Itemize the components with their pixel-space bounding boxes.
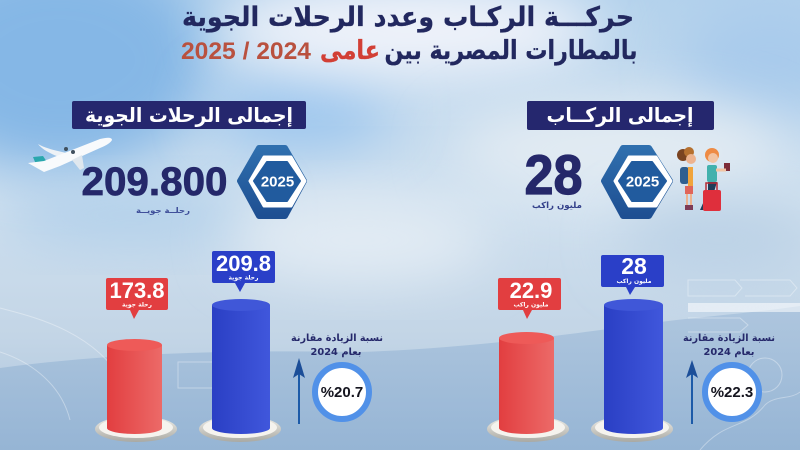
bar: passengers 2025: [591, 299, 673, 442]
bar: passengers 2024: [487, 332, 569, 442]
callout: 173.8: 173.8: [109, 278, 165, 303]
panel: passengers header: إجمالى الركــاب: [546, 103, 694, 127]
title: [181, 2, 638, 66]
bar: flights 2024: [95, 339, 177, 442]
callout: 22.9: 22.9: [510, 278, 552, 303]
callout: 28: مليون راكب: [617, 278, 652, 285]
flights comparison label: نسبة الزيادة مقارنة: [291, 333, 383, 344]
title line 1: حركـــة الركـاب وعدد الرحلات الجوية: [182, 2, 634, 33]
bar: flights 2025: [199, 299, 281, 442]
chart: flights: [95, 251, 383, 442]
flights comparison label: بعام 2024: [310, 347, 362, 358]
title line 2: airports: بالمطارات المصرية بين: [384, 36, 638, 66]
passengers percentage: %22.3: [711, 384, 753, 401]
icon: 2025 hexagon flights: 2025: [261, 174, 294, 190]
panel: flights header: إجمالى الرحلات الجوية: [85, 103, 293, 127]
stat: flights total: 209.800: [82, 160, 228, 204]
icon: travellers: [677, 147, 730, 211]
icon: 2025 hexagon passengers: [604, 148, 671, 216]
stat: passengers total: 28: [524, 143, 582, 206]
callout: 209.8: [212, 251, 275, 292]
title line 2: years: 2025 / 2024: [181, 38, 312, 65]
passengers percentage: [705, 365, 759, 419]
flights unit: رحلــة جويــة: [136, 206, 190, 215]
arrow: passengers increase: [686, 360, 698, 424]
flights percentage: [315, 365, 369, 419]
arrow: flights increase: [293, 358, 305, 424]
callout: 22.9: مليون راكب: [514, 302, 549, 308]
icon: airplane: [28, 138, 112, 172]
callout: 173.8: [106, 278, 168, 319]
passengers unit: مليون راكب: [532, 201, 582, 211]
callout: 28: [601, 253, 664, 295]
callout: 22.9: [498, 278, 561, 319]
callout: 173.8: رحلة جوية: [122, 302, 153, 308]
panel: passengers header: [527, 101, 714, 130]
flights percentage: %20.7: [321, 384, 363, 401]
title line 2: years label: عامى: [320, 36, 380, 66]
callout: 209.8: 209.8: [216, 251, 271, 276]
flights comparison label: [291, 333, 383, 358]
icon: 2025 hexagon flights: [240, 148, 305, 216]
chart: passengers: [487, 253, 775, 442]
passengers comparison label: [683, 333, 775, 358]
passengers comparison label: نسبة الزيادة مقارنة: [683, 333, 775, 344]
icon: 2025 hexagon passengers: 2025: [626, 174, 659, 190]
callout: 28: 28: [621, 253, 647, 279]
callout: 209.8: رحلة جوية: [229, 274, 259, 282]
passengers comparison label: بعام 2024: [704, 347, 754, 358]
